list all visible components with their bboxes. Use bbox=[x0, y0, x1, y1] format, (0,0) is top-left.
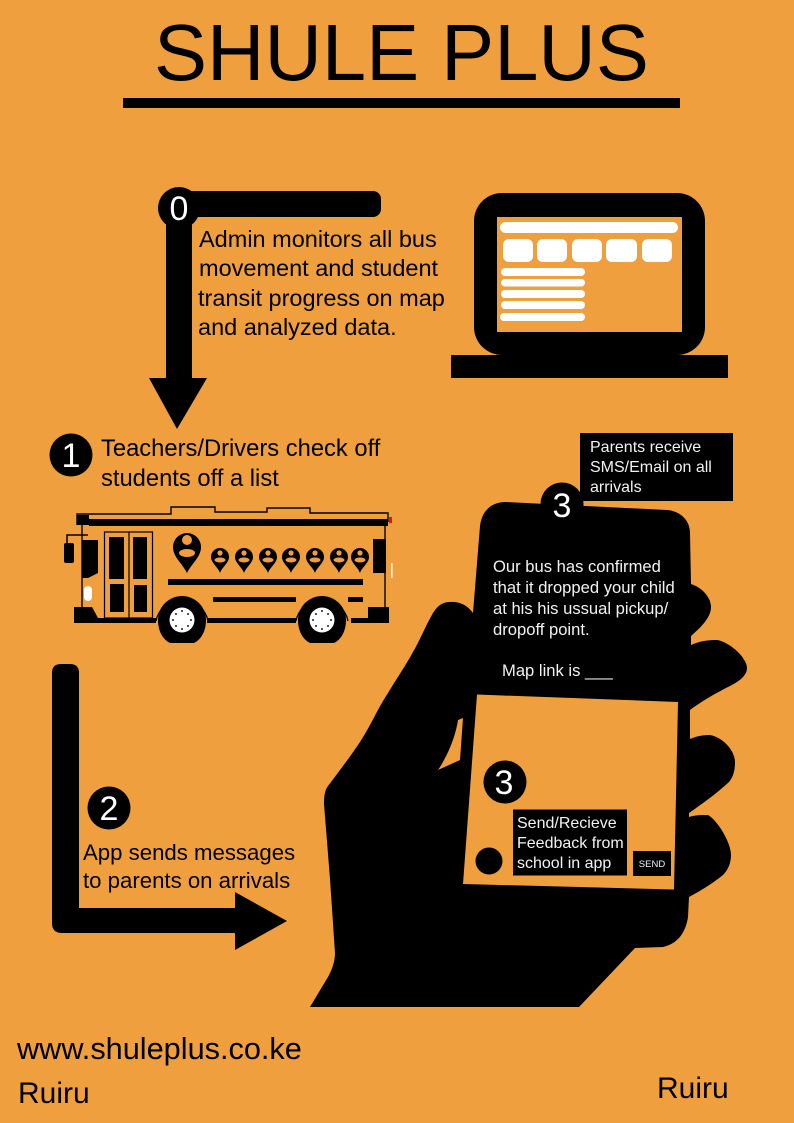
footer: website: www.shuleplus.co.ke bbox=[16, 1031, 302, 1066]
badge: step 2: 2 bbox=[100, 790, 118, 828]
text: phone SMS message: Map link is ___ bbox=[502, 661, 613, 680]
badge: step 1 bbox=[50, 434, 92, 476]
badge: step 2 bbox=[88, 786, 130, 830]
text: teachers and drivers bbox=[101, 435, 381, 492]
illustration: school bus bbox=[64, 507, 392, 643]
callout: send and receive feedback: school in app bbox=[517, 855, 611, 872]
callout: parents receive: arrivals bbox=[590, 479, 642, 496]
icons: row of small location pins bbox=[211, 548, 369, 573]
illustration: hand holding phone bbox=[310, 502, 747, 1007]
phone screen bbox=[463, 694, 678, 890]
icon: rear wheel bbox=[296, 596, 348, 643]
callout: parents receive bbox=[580, 433, 733, 501]
text: phone SMS message bbox=[493, 557, 675, 680]
badge: step 3 in app bbox=[484, 760, 526, 804]
arrow: step 1 to step 3 bbox=[52, 664, 287, 950]
callout: send and receive feedback: Feedback from bbox=[517, 835, 624, 852]
footer: location left: Ruiru bbox=[18, 1077, 90, 1110]
text: app sends messages: to parents on arrivals bbox=[83, 868, 290, 893]
button: send bbox=[633, 851, 671, 876]
callout: parents receive: Parents receive bbox=[590, 439, 701, 456]
text: app sends messages bbox=[83, 840, 295, 893]
badge: step 1: 1 bbox=[62, 437, 80, 475]
title: SHULE PLUS bbox=[154, 8, 649, 97]
callout: send and receive feedback bbox=[513, 810, 627, 876]
callout: send and receive feedback: Send/Recieve bbox=[517, 815, 617, 832]
text: app sends messages: App sends messages bbox=[83, 840, 295, 865]
badge: step 0: 0 bbox=[170, 190, 188, 228]
text: teachers and drivers: Teachers/Drivers check off bbox=[101, 435, 381, 462]
callout: parents receive: SMS/Email on all bbox=[590, 459, 712, 476]
footer: location right: Ruiru bbox=[657, 1072, 729, 1105]
icon: front wheel bbox=[156, 596, 208, 643]
icon: large location pin bbox=[173, 533, 201, 573]
arrow: step 0 to step 1 bbox=[149, 191, 381, 429]
text: admin monitors: Admin monitors all bus bbox=[199, 226, 437, 252]
button: send: SEND bbox=[639, 859, 665, 870]
badge: step 3 top bbox=[540, 482, 584, 526]
text: phone SMS message: that it dropped your child bbox=[493, 578, 675, 597]
text: admin monitors: movement and student bbox=[199, 255, 439, 281]
text: phone SMS message: Our bus has confirmed bbox=[493, 557, 661, 576]
avatar dot bbox=[476, 848, 502, 874]
icon: laptop bbox=[451, 193, 728, 378]
text: admin monitors bbox=[198, 226, 445, 340]
badge: step 3 in app: 3 bbox=[495, 764, 513, 802]
hand notch bbox=[438, 718, 463, 770]
text: phone SMS message: dropoff point. bbox=[493, 620, 590, 639]
text: teachers and drivers: students off a list bbox=[101, 465, 279, 492]
badge: step 0 bbox=[158, 187, 200, 229]
text: admin monitors: transit progress on map bbox=[198, 285, 445, 311]
text: admin monitors: and analyzed data. bbox=[198, 314, 397, 340]
text: phone SMS message: at his his ussual pickup/ bbox=[493, 599, 669, 618]
badge: step 3 top: 3 bbox=[553, 487, 571, 525]
